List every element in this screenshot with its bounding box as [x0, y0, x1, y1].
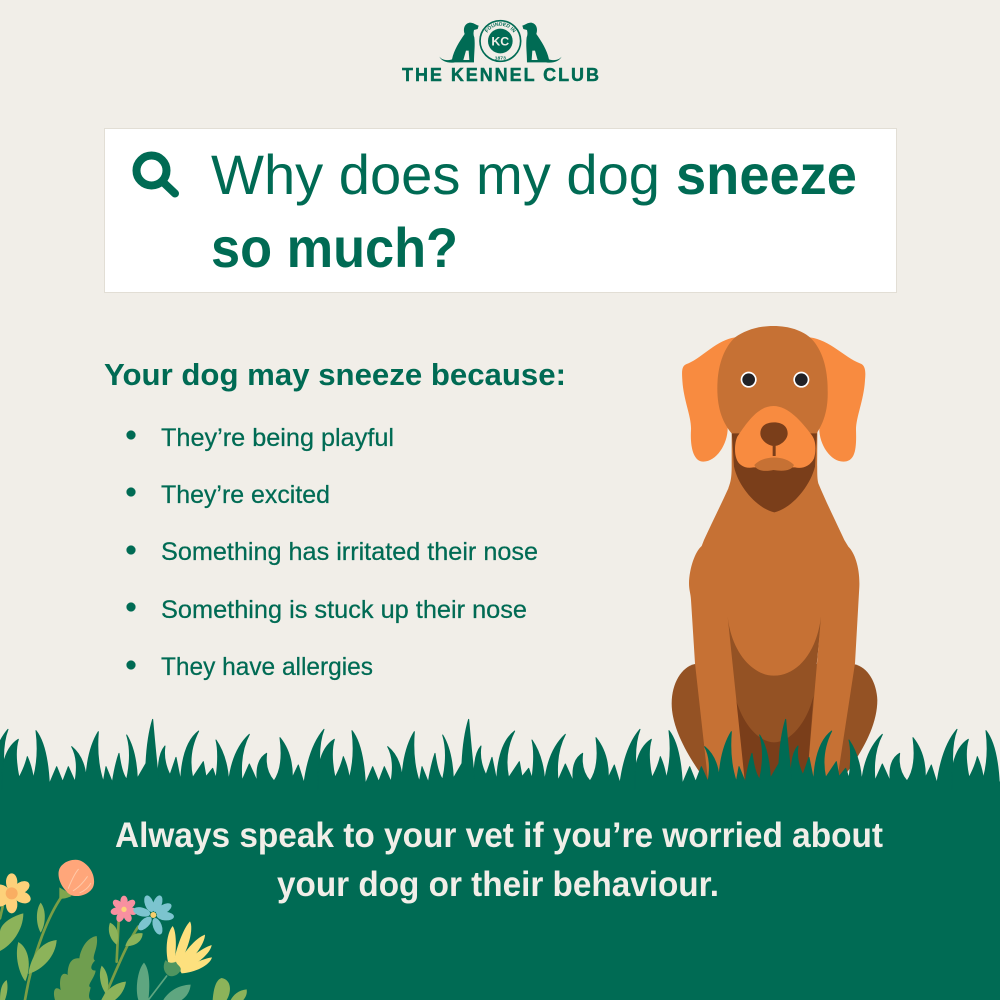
- left eye: [741, 372, 757, 388]
- chest beard: [732, 427, 817, 512]
- right eye: [793, 372, 809, 388]
- icon: founded badge: 1873: [495, 56, 506, 62]
- icon: pink flower: [110, 896, 138, 923]
- subheading: Your dog may sneeze because:: [104, 357, 566, 392]
- bullet list of reasons: They’re excited: [161, 481, 330, 509]
- head: [717, 326, 828, 433]
- striped leaves: [137, 963, 191, 1000]
- title: Why does my dog: [211, 143, 660, 206]
- illustration: seated dog: [672, 326, 877, 787]
- icon: left seated dog: [439, 23, 479, 63]
- nose: [760, 422, 788, 456]
- icon: magnifying glass: [136, 156, 175, 194]
- body and front legs: [689, 430, 859, 783]
- bullet list of reasons: Something has irritated their nose: [161, 538, 538, 566]
- bullet list of reasons: They’re being playful: [161, 424, 394, 452]
- footer message: Always speak to your vet if you’re worried about: [115, 816, 883, 855]
- footer message: your dog or their behaviour.: [277, 865, 719, 904]
- icon: blue flower: [132, 894, 174, 936]
- green stems: [0, 897, 167, 1000]
- title: [211, 143, 857, 279]
- title: so much?: [211, 216, 458, 279]
- panel: title box: [104, 128, 896, 292]
- left ear: [682, 337, 747, 462]
- mouth: [754, 457, 794, 471]
- icon: founded badge: FOUNDED IN: [484, 22, 516, 33]
- right ear: [800, 337, 865, 462]
- grass and footer band: [0, 719, 1000, 1000]
- title: sneeze: [676, 143, 857, 206]
- footer message: [115, 816, 883, 904]
- icon: founded badge: [479, 20, 522, 62]
- icon: founded badge: KC: [491, 34, 509, 48]
- illustration: flowers: [0, 860, 247, 1000]
- belly: [727, 617, 822, 742]
- muzzle: [735, 406, 815, 468]
- icon: coral tulip: [59, 860, 94, 899]
- bullet list of reasons: They have allergies: [161, 653, 373, 681]
- icon: orange daisy: [0, 873, 32, 913]
- icon: yellow daisy: [164, 921, 212, 976]
- icon: right seated dog: [522, 23, 562, 63]
- bullet list of reasons: [126, 424, 538, 681]
- grass blades: [0, 719, 1000, 790]
- logo: The Kennel Club: [402, 20, 599, 85]
- shadow between the legs: [735, 697, 813, 787]
- bullet list of reasons: Something is stuck up their nose: [161, 596, 527, 624]
- haunches: [672, 664, 877, 787]
- leaves: [0, 903, 247, 1000]
- logo wordmark: THE KENNEL CLUB: [402, 65, 599, 85]
- oak leaf: [54, 936, 97, 1000]
